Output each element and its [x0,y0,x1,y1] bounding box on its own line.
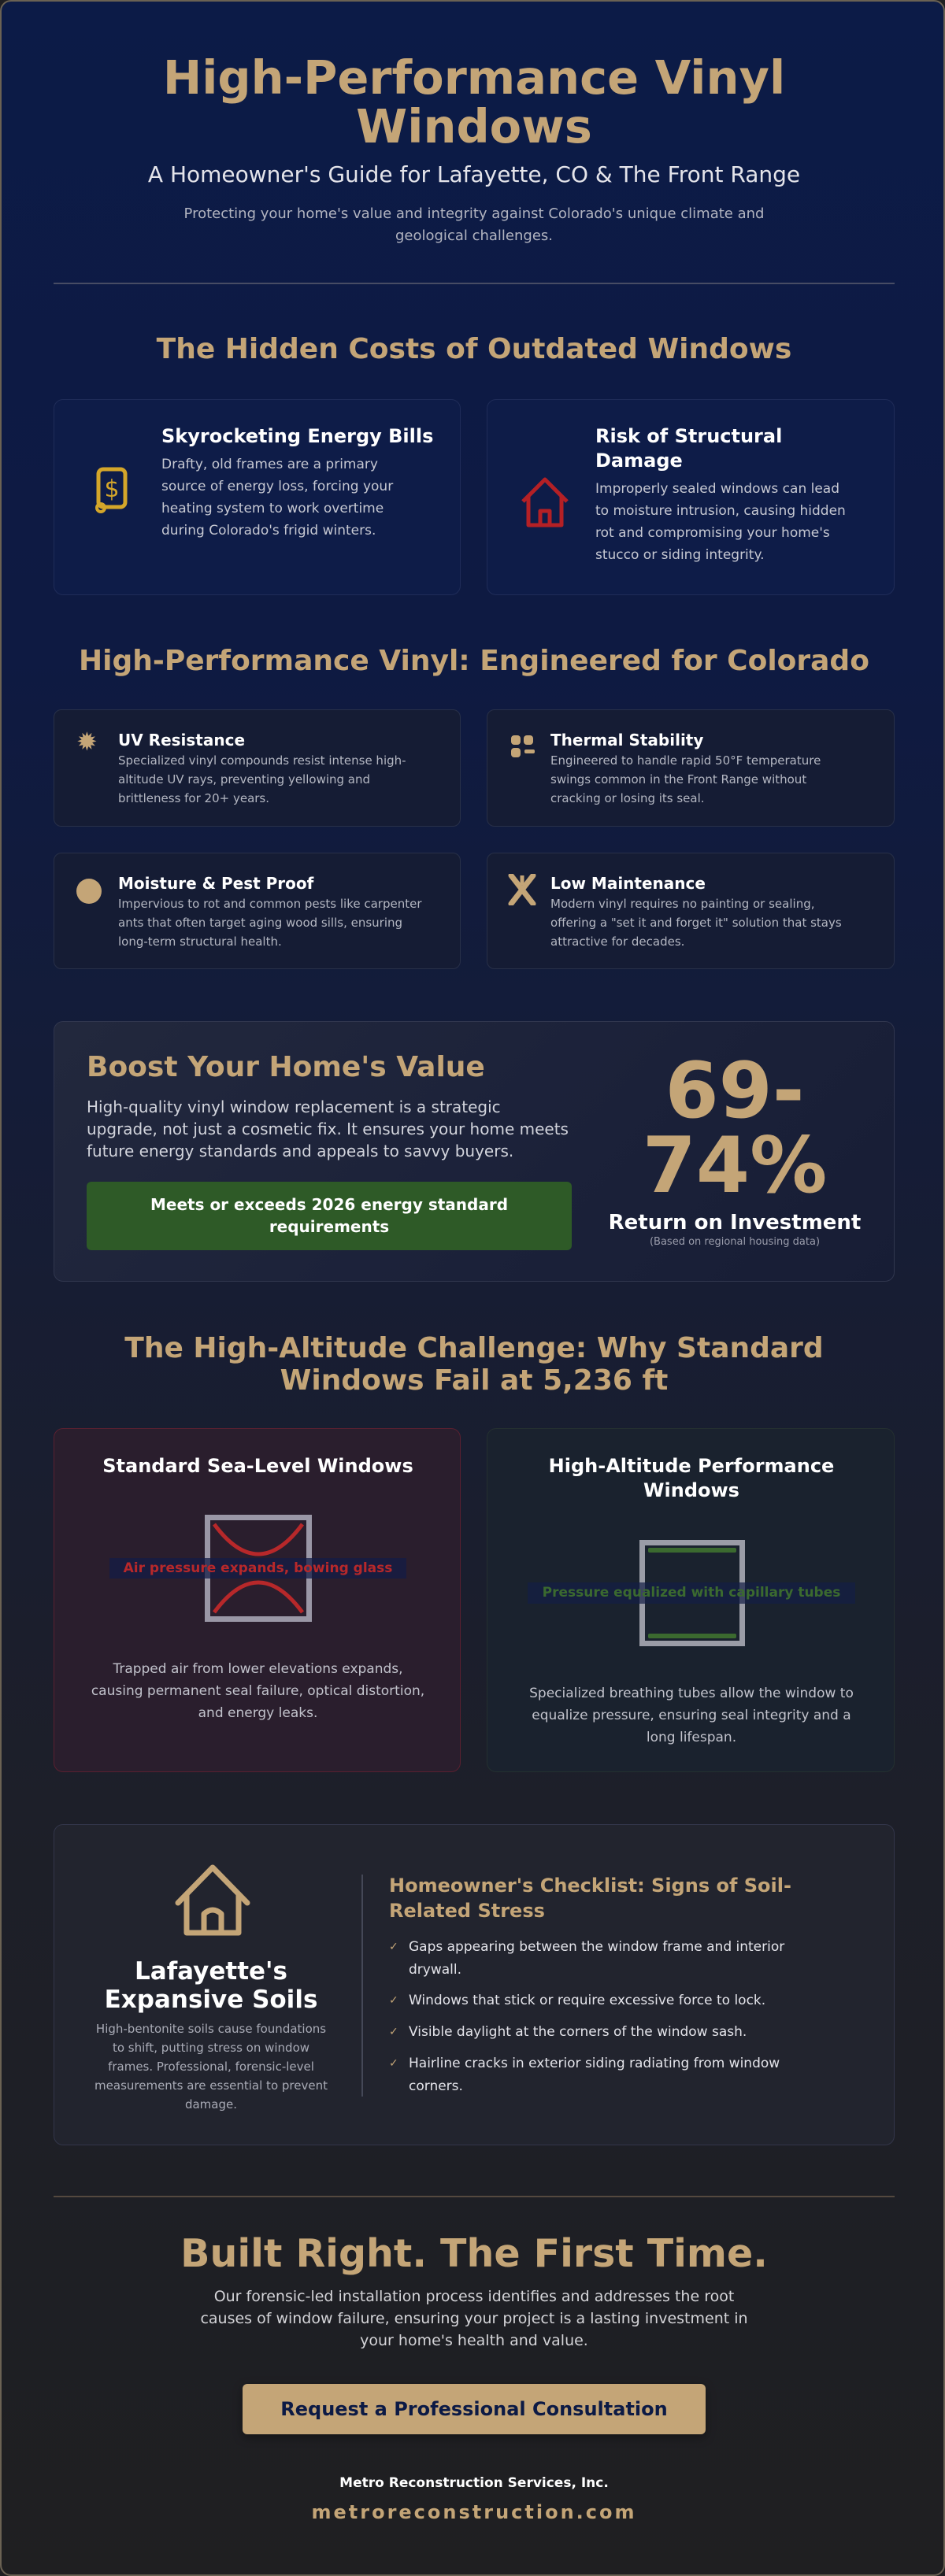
panel: energy bills [54,399,461,595]
icon: blocks [511,735,535,757]
text: Improperly sealed windows can lead [595,481,839,497]
text: closing: Our forensic-led installation process identifies and addresses the root causes of window failure, ensuring your project is a lasting investment in your home's health and value. [200,2288,748,2349]
feature: moisture [54,853,461,969]
checklist: ✓ [389,1994,398,2007]
text: heating system to work overtime [161,501,384,516]
heading: Lafayette [105,1957,317,2014]
checklist: Visible daylight at the corners of the window sash. [409,2024,747,2040]
icon: money: $ [104,476,120,503]
checklist: Hairline cracks in exterior siding radiating from window corners. [409,2056,780,2094]
text [91,1661,424,1721]
text: High-bentonite soils cause foundations to shift, putting stress on window frames. Professional, forensic-level measurements are essential to prevent damage. [94,2022,328,2112]
text: Skyrocketing Energy Bills [161,425,433,447]
panel: ROI [54,1021,895,1282]
subtitle: A Homeowner's Guide for Lafayette, CO & The Front Range [148,161,800,187]
feature: moisture: Moisture & Pest Proof [118,874,313,893]
feature: thermal: swings common in the Front Range without [550,772,806,786]
callout: energy standard: requirements [269,1217,389,1236]
text: Trapped air from lower elevations expands, [113,1661,403,1677]
heading: built right: Built Right. The First Time. [180,2231,768,2276]
label: Air pressure expands, bowing glass [124,1560,392,1576]
heading: boost: Boost Your Home's Value [87,1051,485,1083]
label [528,1582,855,1604]
checklist: ✓ [389,1941,398,1953]
checklist: Windows that stick or require excessive force to lock. [409,1993,765,2008]
text: Specialized breathing tubes allow the window to [529,1686,854,1701]
text: causing permanent seal failure, optical distortion, [91,1683,424,1699]
stat: ROI: 74% [643,1121,827,1211]
icon: house red [521,477,569,527]
text: Drafty, old frames are a primary [161,457,378,472]
diagram: bowing glass [205,1515,312,1622]
feature: thermal [487,709,895,827]
stat: ROI [609,1046,861,1248]
text: source of energy loss, forcing your [161,479,393,494]
diagram: equalized [639,1540,745,1646]
feature: UV: brittleness for 20+ years. [118,791,269,805]
heading: high altitude: The High-Altitude Challenge: Why Standard [124,1332,824,1364]
company name: Metro Reconstruction Services, Inc. [339,2475,609,2491]
callout: energy standard [87,1182,572,1250]
text: High-quality vinyl window replacement is a strategic upgrade, not just a cosmetic fix. It ensures your home meets future energy standards and appeals to savvy buyers. [87,1097,569,1160]
text: equalize pressure, ensuring seal integrity and a [532,1708,851,1723]
label: Pressure equalized with capillary tubes [543,1585,840,1601]
callout: energy standard: Meets or exceeds 2026 energy standard [150,1195,508,1214]
feature: UV: altitude UV rays, preventing yellowing and [118,772,370,786]
icon: money [95,468,128,513]
heading: high altitude [124,1332,824,1397]
button: consultation: Request a Professional Consultation [280,2398,668,2420]
panel: sea-level windows [54,1428,461,1772]
icon: tools [509,874,536,905]
panel: high-altitude windows: High-Altitude Performance [549,1455,834,1477]
stat: ROI: Return on Investment [609,1211,861,1234]
heading: Lafayette: Expansive Soils [105,1986,317,2014]
panel: high-altitude windows [487,1428,895,1772]
checklist: ✓ [389,2026,398,2038]
feature: maintenance: attractive for decades. [550,935,684,949]
button: consultation [243,2384,706,2434]
text: Damage [595,450,683,472]
icon: sun: ✹ [76,727,98,757]
feature: UV: Specialized vinyl compounds resist intense high- [118,753,406,768]
text [529,1686,854,1745]
icon: circle [76,879,102,904]
text: long lifespan. [647,1730,736,1745]
feature: maintenance [487,853,895,969]
panel: sea-level windows: Standard Sea-Level Windows [102,1455,413,1477]
heading: high altitude: Windows Fail at 5,236 ft [280,1364,668,1397]
feature: moisture: long-term structural health. [118,935,282,949]
feature: UV: UV Resistance [118,731,245,749]
feature: maintenance: offering a "set it and forget it" solution that stays [550,916,842,930]
feature: thermal: cracking or losing its seal. [550,791,705,805]
panel: high-altitude windows: Windows [643,1479,739,1501]
title: Windows [356,99,592,154]
checklist [389,1875,791,2094]
text: Risk of Structural [595,425,782,447]
checklist: Homeowner's Checklist: Signs of Soil-Related Stress [389,1875,791,1922]
feature: maintenance: Modern vinyl requires no painting or sealing, [550,897,814,911]
feature: maintenance: Low Maintenance [550,874,706,893]
heading: hidden costs: The Hidden Costs of Outdated Windows [157,333,791,365]
text: during Colorado's frigid winters. [161,523,376,539]
heading: engineered: High-Performance Vinyl: Engineered for Colorado [79,645,869,677]
title [163,50,785,154]
text: rot and compromising your home's [595,525,830,541]
feature: thermal: Thermal Stability [550,731,703,749]
text: to moisture intrusion, causing hidden [595,503,846,519]
feature: thermal: Engineered to handle rapid 50°F temperature [550,753,821,768]
text: and energy leaks. [198,1705,317,1721]
checklist: ✓ [389,2057,398,2070]
checklist: Gaps appearing between the window frame and interior drywall. [409,1939,784,1978]
panel: expansive soils [54,1824,895,2145]
tagline: Protecting your home's value and integrity against Colorado's unique climate and geological challenges. [184,205,764,244]
feature: moisture: Impervious to rot and common pests like carpenter [118,897,422,911]
feature: moisture: ants that often target aging wood sills, ensuring [118,916,402,930]
icon: house gold [175,1864,250,1935]
text: stucco or siding integrity. [595,547,764,563]
label [109,1558,406,1579]
feature: UV [54,709,461,827]
text [161,425,433,539]
title: High-Performance Vinyl [163,50,785,105]
heading: Lafayette: Lafayette's [135,1957,287,1986]
stat: ROI: (Based on regional housing data) [650,1236,820,1248]
text [595,425,846,563]
panel: structural damage [487,399,895,595]
stat: ROI: 69- [665,1046,805,1136]
website: metroreconstruction.com [311,2501,636,2523]
